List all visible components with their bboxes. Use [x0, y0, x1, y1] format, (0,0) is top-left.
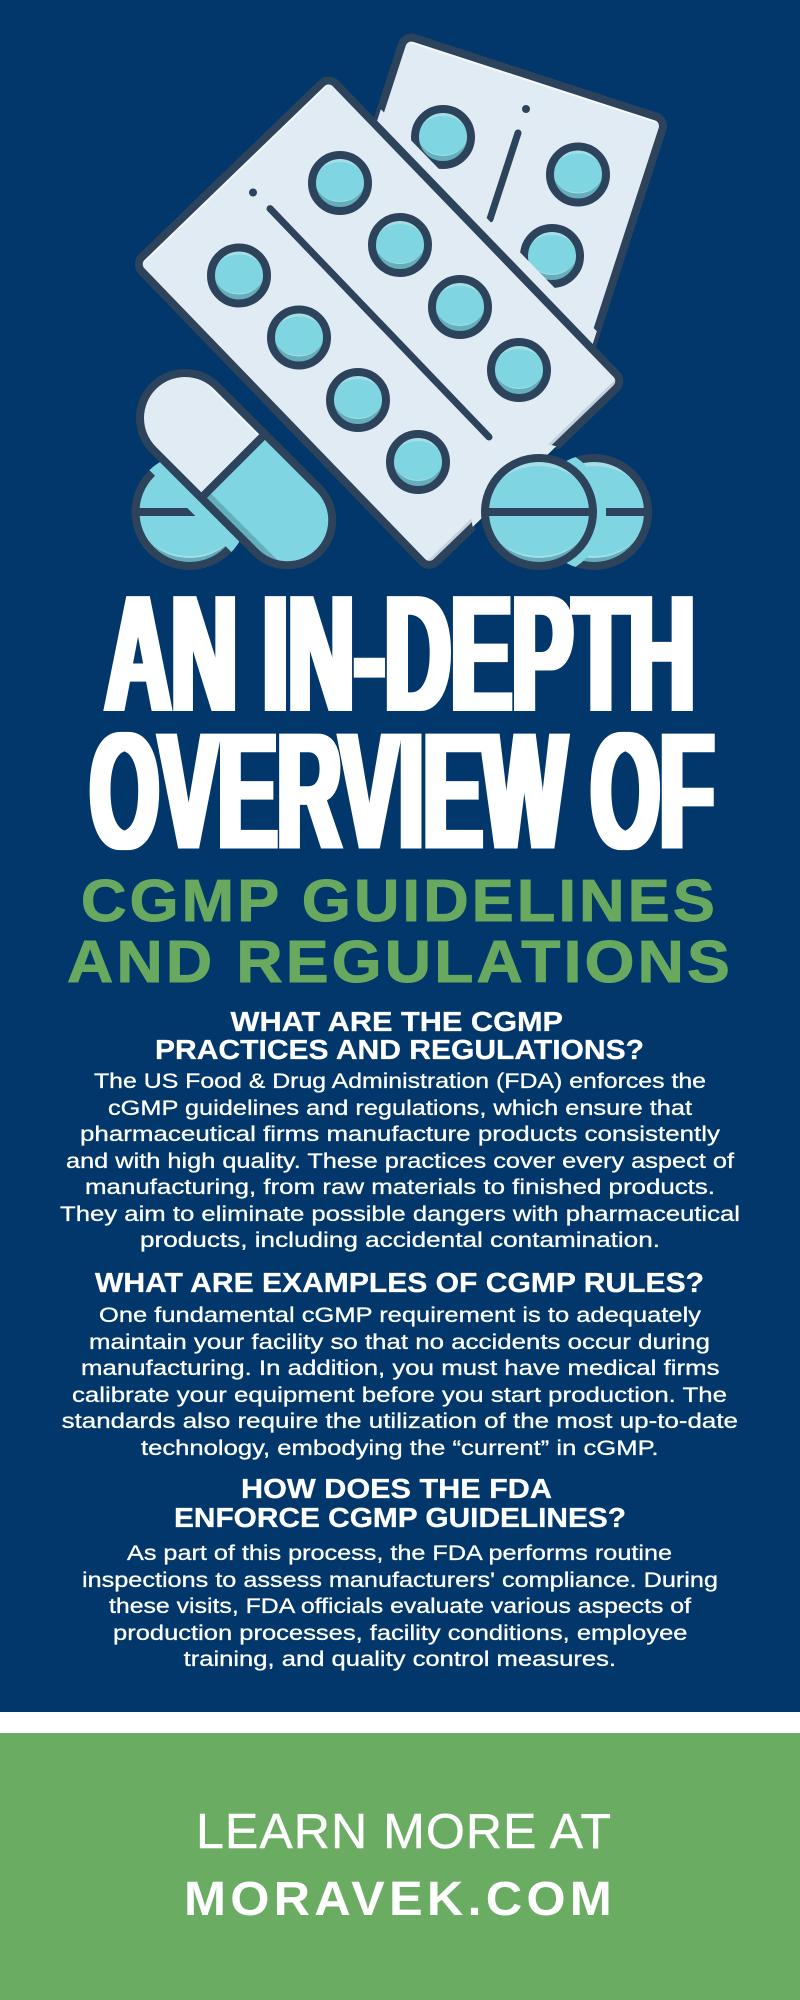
- section: examples of cGMP rules: [62, 1267, 738, 1460]
- text block: examples of cGMP rules: [62, 1304, 738, 1460]
- title: [90, 561, 714, 884]
- text block: what are the cGMP practices: and with high quality. These practices cover every aspect of: [66, 1150, 734, 1173]
- text block: what are the cGMP practices: The US Food & Drug Administration (FDA) enforces the: [94, 1070, 706, 1093]
- text block: what are the cGMP practices: cGMP guidelines and regulations, which ensure that: [108, 1097, 692, 1120]
- icon: capsule: [136, 369, 336, 570]
- text block: examples of cGMP rules: standards also require the utilization of the most up-to-date: [62, 1410, 738, 1433]
- section: what are the cGMP practices: [60, 1006, 740, 1252]
- subtitle: CGMP GUIDELINES: [81, 868, 718, 934]
- text block: how the FDA enforces cGMP: production processes, facility conditions, employee: [113, 1622, 688, 1645]
- heading: how the FDA enforces cGMP: [174, 1473, 626, 1533]
- text block: examples of cGMP rules: One fundamental cGMP requirement is to adequately: [99, 1304, 702, 1327]
- heading: what are the cGMP practices: [155, 1006, 644, 1065]
- text block: what are the cGMP practices: pharmaceutical firms manufacture products consistently: [80, 1123, 721, 1146]
- heading: how the FDA enforces cGMP: HOW DOES THE FDA: [241, 1473, 552, 1504]
- text block: how the FDA enforces cGMP: inspections to assess manufacturers' compliance. During: [82, 1569, 718, 1592]
- heading: how the FDA enforces cGMP: ENFORCE CGMP GUIDELINES?: [174, 1502, 626, 1533]
- section: how the FDA enforces cGMP: [82, 1473, 718, 1671]
- illustration: blister packs, capsule and tablets: [132, 34, 667, 570]
- heading: examples of cGMP rules: WHAT ARE EXAMPLES OF CGMP RULES?: [95, 1267, 704, 1298]
- heading: what are the cGMP practices: WHAT ARE THE CGMP: [230, 1006, 563, 1037]
- call to action: learn more: LEARN MORE AT: [196, 1805, 612, 1859]
- text block: how the FDA enforces cGMP: these visits, FDA officials evaluate various aspects of: [109, 1595, 691, 1618]
- call to action: website: MORAVEK.COM: [184, 1873, 616, 1926]
- text block: what are the cGMP practices: products, including accidental contamination.: [140, 1229, 660, 1252]
- text block: how the FDA enforces cGMP: As part of this process, the FDA performs routine: [127, 1542, 672, 1565]
- heading: what are the cGMP practices: PRACTICES AND REGULATIONS?: [155, 1034, 644, 1065]
- white divider band: [0, 1712, 800, 1733]
- subtitle: [67, 868, 733, 995]
- text block: what are the cGMP practices: [60, 1070, 740, 1252]
- icon: front blister pack: [135, 76, 623, 569]
- icon: left tablet: [132, 462, 240, 570]
- icon: right tablets: [471, 444, 648, 580]
- text block: how the FDA enforces cGMP: training, and quality control measures.: [184, 1648, 616, 1671]
- text block: what are the cGMP practices: They aim to eliminate possible dangers with pharmaceutical: [60, 1203, 740, 1226]
- text block: what are the cGMP practices: manufacturing, from raw materials to finished products.: [85, 1176, 715, 1199]
- text block: examples of cGMP rules: maintain your facility so that no accidents occur during: [89, 1331, 710, 1354]
- text block: examples of cGMP rules: technology, embodying the “current” in cGMP.: [141, 1437, 658, 1460]
- text block: examples of cGMP rules: calibrate your equipment before you start production. The: [72, 1384, 727, 1407]
- text block: how the FDA enforces cGMP: [82, 1542, 718, 1671]
- icon: back blister pack: [374, 34, 667, 347]
- footer panel: [0, 1733, 800, 2000]
- text block: examples of cGMP rules: manufacturing. In addition, you must have medical firms: [81, 1357, 720, 1380]
- subtitle: AND REGULATIONS: [67, 929, 733, 995]
